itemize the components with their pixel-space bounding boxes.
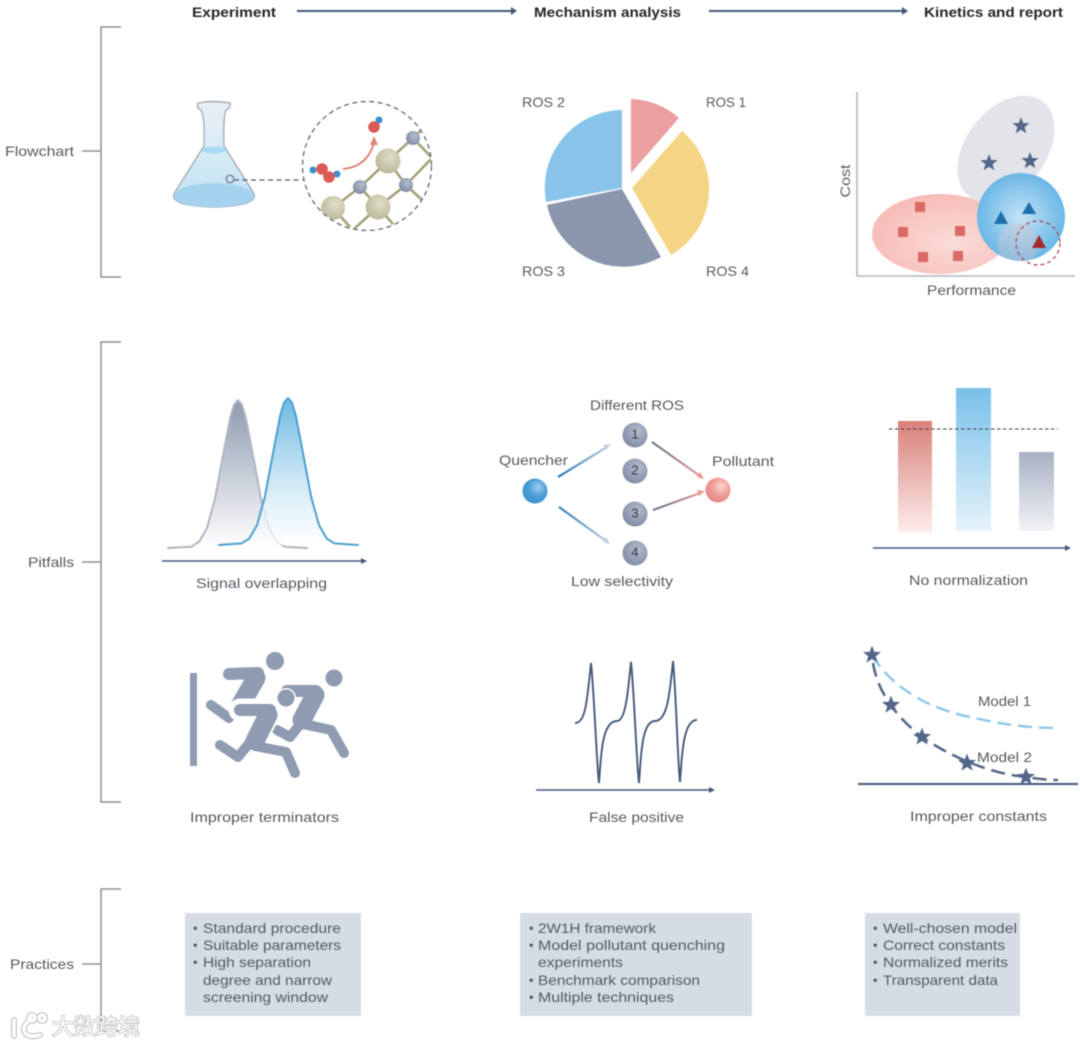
arrow: quencher to ROS 1 bbox=[558, 444, 611, 477]
panel: experiment practices: • bbox=[193, 938, 198, 952]
panel: experiment practices: Suitable parameters bbox=[203, 937, 341, 953]
dashed connector bbox=[234, 179, 303, 181]
panel: kinetics practices: • bbox=[873, 972, 878, 988]
curve: Model 1 bbox=[872, 655, 1057, 728]
scatter chart: cost versus performance bbox=[837, 77, 1075, 298]
panel: mechanism practices: 2W1H framework bbox=[538, 920, 657, 936]
panel: mechanism practices bbox=[520, 913, 752, 1016]
caption: Signal overlapping bbox=[196, 575, 327, 591]
icon: finish post bbox=[190, 673, 197, 766]
pitfall: false positive bbox=[536, 661, 715, 825]
runner: right bbox=[277, 670, 344, 753]
panel: kinetics practices: Normalized merits bbox=[883, 954, 1008, 970]
chart: overlapping peaks bbox=[168, 398, 358, 548]
panel: kinetics practices bbox=[865, 913, 1020, 1016]
panel: experiment practices: High separation bbox=[203, 954, 311, 970]
header: workflow stages bbox=[192, 4, 1063, 20]
heading: Mechanism analysis: Mechanism analysis bbox=[534, 4, 681, 20]
panel: mechanism practices: Benchmark comparison bbox=[538, 972, 700, 988]
panel: kinetics practices: Well-chosen model bbox=[883, 920, 1017, 936]
panel: experiment practices: degree and narrow bbox=[203, 972, 333, 988]
arrow: mechanism to kinetics bbox=[709, 7, 908, 15]
pitfall: improper terminators bbox=[190, 652, 344, 825]
label: Pollutant: Pollutant bbox=[712, 453, 774, 469]
slice: ROS 4 bbox=[632, 131, 709, 255]
panel: mechanism practices: experiments bbox=[538, 954, 623, 970]
panel: kinetics practices: • bbox=[873, 954, 878, 970]
panel: kinetics practices: • bbox=[873, 920, 878, 936]
icon: flask bbox=[174, 102, 254, 207]
axis arrow bbox=[536, 787, 715, 793]
pitfall: no normalization bar chart bbox=[873, 388, 1071, 588]
panel: mechanism practices: • bbox=[529, 972, 534, 988]
slice: ROS 3 bbox=[547, 189, 661, 267]
axes bbox=[857, 92, 1075, 276]
watermark logo bbox=[14, 1015, 45, 1036]
caption: Low selectivity bbox=[571, 573, 673, 589]
label: Practices: Practices bbox=[10, 956, 74, 972]
bracket: Practices bbox=[10, 889, 121, 1031]
node: ROS 3: 3 bbox=[631, 506, 639, 520]
bar: red bbox=[898, 421, 932, 533]
caption: Improper terminators bbox=[190, 809, 339, 825]
cluster: triangles bbox=[977, 173, 1065, 267]
arrow: ROS 1 to pollutant bbox=[652, 442, 704, 479]
cluster: squares bbox=[872, 194, 1008, 274]
bar: blue bbox=[956, 388, 991, 531]
icon: magnified lattice bbox=[302, 102, 432, 230]
panel: kinetics practices: Correct constants bbox=[883, 937, 1005, 953]
node: ROS 3 bbox=[622, 502, 648, 526]
slice: ROS 2 bbox=[545, 110, 622, 202]
label: ROS 1: ROS 1 bbox=[706, 94, 746, 110]
panel: kinetics practices: Transparent data bbox=[883, 972, 998, 988]
label: Pitfalls: Pitfalls bbox=[28, 554, 74, 570]
runner: top bbox=[211, 652, 284, 718]
runner: front bbox=[220, 688, 296, 773]
node: quencher bbox=[522, 478, 548, 504]
panel: experiment practices: screening window bbox=[203, 989, 329, 1005]
caption: Improper constants bbox=[910, 808, 1047, 824]
icon: conical flask with magnified catalyst bbox=[174, 102, 432, 230]
node: ROS 2: 2 bbox=[631, 462, 639, 478]
bracket: Pitfalls bbox=[28, 342, 121, 802]
pitfall: improper constants bbox=[858, 646, 1078, 824]
curve: Model 2 bbox=[873, 663, 1058, 780]
label: Model 2: Model 2 bbox=[977, 749, 1032, 765]
caption: False positive bbox=[589, 809, 684, 825]
slice: ROS 1 bbox=[631, 99, 679, 173]
arrow: quencher to ROS 4 bbox=[559, 507, 610, 544]
bar: gray bbox=[1019, 452, 1054, 531]
label: ROS 2: ROS 2 bbox=[522, 94, 565, 110]
axis bbox=[858, 783, 1078, 785]
watermark text: 大数跨境 bbox=[52, 1014, 140, 1040]
pitfall: low selectivity network bbox=[499, 397, 774, 589]
panel: experiment practices: • bbox=[193, 954, 198, 970]
node: ROS 4: 4 bbox=[631, 544, 639, 560]
axis label: Performance: Performance bbox=[927, 282, 1016, 298]
bracket: Flowchart bbox=[5, 27, 121, 277]
panel: mechanism practices: Model pollutant quenching bbox=[538, 937, 725, 953]
pitfall: signal overlapping bbox=[162, 398, 367, 591]
node: pollutant bbox=[706, 478, 730, 502]
panel: kinetics practices: • bbox=[873, 938, 878, 952]
heading: Experiment: Experiment bbox=[192, 4, 276, 20]
axis label: Cost: Cost bbox=[837, 164, 853, 198]
data stars bbox=[863, 646, 1035, 785]
label: ROS 4: ROS 4 bbox=[706, 263, 749, 279]
label: Different ROS: Different ROS bbox=[590, 397, 684, 413]
caption: No normalization bbox=[909, 572, 1028, 588]
panel: mechanism practices: • bbox=[529, 990, 534, 1004]
reference line bbox=[889, 428, 1058, 430]
panel: experiment practices: Standard procedure bbox=[203, 920, 341, 936]
panel: mechanism practices: • bbox=[529, 920, 534, 936]
node: ROS 4 bbox=[622, 540, 648, 566]
chart: oscillating signal bbox=[575, 661, 697, 783]
label: ROS 3: ROS 3 bbox=[522, 263, 565, 279]
highlighted optimum bbox=[1016, 221, 1060, 265]
node: ROS 1: 1 bbox=[631, 426, 639, 442]
heading: Kinetics and report: Kinetics and report bbox=[924, 4, 1063, 20]
label: Model 1: Model 1 bbox=[978, 693, 1031, 709]
arrow: ROS 3 to pollutant bbox=[653, 490, 705, 510]
pie chart: ROS contributions bbox=[522, 94, 749, 279]
watermark bbox=[14, 1014, 140, 1040]
axis arrow bbox=[162, 558, 367, 564]
node: ROS 2 bbox=[622, 458, 648, 484]
label: Flowchart: Flowchart bbox=[5, 143, 74, 159]
panel: mechanism practices: • bbox=[529, 938, 534, 952]
panel: experiment practices: • bbox=[193, 920, 198, 936]
node: ROS 1 bbox=[622, 422, 648, 448]
panel: experiment practices bbox=[185, 913, 361, 1016]
arrow: experiment to mechanism bbox=[297, 7, 517, 15]
icon: runners bbox=[211, 652, 344, 773]
label: Quencher: Quencher bbox=[499, 452, 568, 468]
panel: mechanism practices: Multiple techniques bbox=[538, 989, 674, 1005]
axis arrow bbox=[873, 545, 1071, 551]
cluster: stars bbox=[938, 77, 1074, 221]
